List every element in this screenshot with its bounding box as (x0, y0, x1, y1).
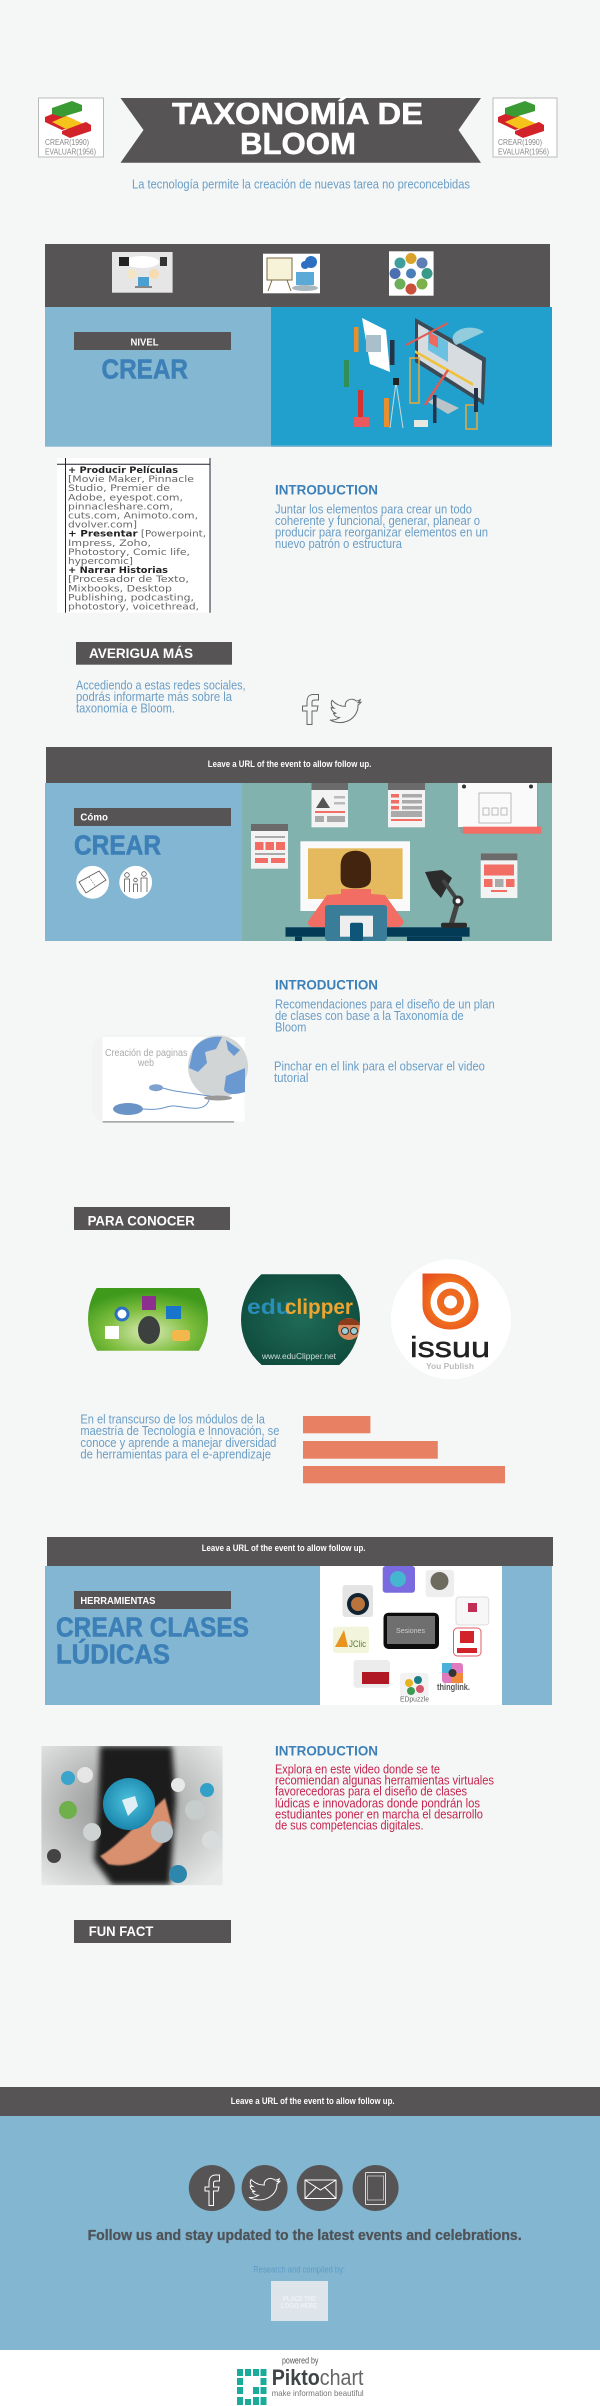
tools list image: [Movie Maker, Pinnacle (68, 475, 195, 485)
tools list image (57, 458, 210, 613)
header: logo left (38, 98, 104, 157)
label bar: para conocer (74, 1207, 230, 1230)
window E (481, 853, 517, 898)
label bar: nivel (74, 332, 231, 350)
call to action text: Follow us and stay updated to the latest events and celebrations. (88, 2227, 522, 2244)
logo: issuu: You Publish (426, 1362, 474, 1371)
heading: crear clases lúdicas: LÚDICAS (56, 1638, 170, 1669)
footer: piktochart (0, 2350, 600, 2406)
label bar: para conocer: PARA CONOCER (88, 1212, 195, 1228)
tools list image: + Producir Películas (68, 466, 178, 476)
introduction 3: lúdicas e innovadoras donde pondrán los (275, 1797, 480, 1811)
piktochart wordmark: Piktochart (272, 2365, 364, 2390)
powered by: powered by (282, 2355, 319, 2365)
introduction 1: INTRODUCTION (275, 481, 378, 497)
introduction 1: nuevo patrón o estructura (275, 537, 402, 551)
text: redes sociales: Accediendo a estas redes sociales, (76, 679, 246, 693)
introduction 2 (274, 976, 495, 1085)
label bar: nivel: NIVEL (130, 338, 158, 348)
introduction 1 (275, 481, 488, 551)
header: logo right: CREAR(1990) (498, 138, 542, 147)
illustration: web design team (271, 307, 552, 447)
panel: follow us (0, 2116, 600, 2350)
introduction 1: producir para reorganizar elementos en un (275, 525, 488, 539)
introduction 3: Explora en este video donde se te (275, 1763, 440, 1777)
label bar: herramientas: HERRAMIENTAS (80, 1595, 155, 1607)
label bar: cómo: Cómo (80, 812, 108, 824)
icon: twitter (242, 2165, 288, 2211)
image: educlipper: clipper (285, 1296, 353, 1319)
band: url 1: Leave a URL of the event to allow follow up. (208, 759, 371, 770)
heading: crear clases lúdicas: CREAR CLASES (56, 1612, 249, 1643)
text: módulos maestría: conoce y aprende a manejar diversidad (80, 1436, 276, 1450)
header: logo right: EVALUAR(1956) (498, 147, 549, 156)
image: app collage (320, 1566, 502, 1705)
icon: mail (297, 2165, 343, 2211)
image: hand holding globe (41, 1746, 223, 1885)
header: logo left: EVALUAR(1956) (45, 147, 96, 156)
logo placeholder: LOGO HERE (281, 2303, 317, 2310)
introduction 3: INTRODUCTION (275, 1742, 378, 1758)
icon: phone (353, 2165, 399, 2211)
label bar: fun fact (74, 1920, 231, 1943)
icon: facebook (189, 2165, 235, 2211)
image: educlipper: www.eduClipper.net (261, 1352, 337, 1361)
thumbnail: colour wheel (389, 251, 434, 296)
logo placeholder (271, 2281, 328, 2321)
image: app collage: EDpuzzle (400, 1696, 429, 1704)
heading: crear: CREAR (74, 829, 161, 860)
tools list image: Studio, Premier de (68, 484, 171, 494)
image: creación de paginas web: web (137, 1058, 154, 1069)
text: redes sociales: taxonomía e Bloom. (76, 701, 175, 715)
piktochart logo mark (237, 2369, 266, 2405)
logo: issuu (391, 1259, 511, 1379)
poster (458, 783, 542, 834)
window B (388, 783, 425, 827)
panel: herramientas (45, 1566, 552, 1705)
tools list image: Photostory, Comic life, (68, 548, 190, 558)
text: redes sociales: podrás informarte más sobre la (76, 690, 232, 704)
introduction 1: Juntar los elementos para crear un todo (275, 503, 472, 517)
text: módulos maestría: de herramientas para el e-aprendizaje (80, 1447, 271, 1461)
icon: twitter outline (330, 699, 361, 723)
introduction 3: de sus competencias digitales. (275, 1819, 424, 1833)
image: creación de paginas web: Creación de paginas (105, 1048, 188, 1059)
title banner: BLOOM (240, 126, 356, 161)
tools list image: cuts.com, Animoto.com, (68, 512, 198, 522)
thumbnail: easel and computer (263, 254, 320, 293)
icon: ticket (76, 866, 109, 899)
image: creación de paginas web (92, 1035, 248, 1123)
image: app collage: JClic (349, 1639, 366, 1649)
title banner: TAXONOMÍA DE (172, 96, 423, 131)
subtitle: La tecnología permite la creación de nuevas tarea no preconcebidas (132, 176, 470, 192)
tools list image: [Procesador de Texto, (68, 575, 189, 585)
header: logo right (493, 98, 557, 157)
introduction 3: estudiantes poner en marcha el desarrollo (275, 1808, 483, 1822)
label bar: averigua más: AVERIGUA MÁS (89, 646, 193, 661)
text: módulos maestría (80, 1413, 279, 1461)
research credit: Research and compiled by: (253, 2264, 345, 2275)
introduction 2: tutorial (274, 1071, 308, 1085)
label bar: fun fact: FUN FACT (89, 1923, 154, 1939)
tools list image: Mixbooks, Desktop (68, 584, 172, 594)
introduction 2: Pinchar en el link para el observar el video (274, 1060, 485, 1074)
icon: family (119, 866, 152, 899)
tools list image: pinnacleshare.com, (68, 502, 173, 512)
band: url 2 (47, 1537, 553, 1566)
window D (251, 824, 288, 869)
band: url 1 (46, 747, 552, 783)
header: logo left: CREAR(1990) (45, 138, 89, 147)
image: app collage: thinglink. (437, 1682, 470, 1692)
text: módulos maestría: maestría de Tecnología e Innovación, se (80, 1424, 279, 1438)
tagline: make information beautiful (272, 2388, 364, 2398)
label bar: averigua más (76, 642, 232, 665)
window A (312, 783, 348, 827)
icon: facebook outline (302, 694, 318, 724)
illustration: person at computer (242, 783, 552, 941)
band: url 3: Leave a URL of the event to allow follow up. (231, 2096, 395, 2107)
title banner (120, 96, 481, 163)
tools list image: photostory, voicethread, (68, 602, 199, 612)
logo placeholder: PLACE THE (283, 2296, 316, 2303)
image: app collage: Sesiones (396, 1628, 426, 1635)
tools list image: Publishing, podcasting, (68, 593, 194, 603)
label bar: herramientas (74, 1591, 231, 1609)
heading: crear: CREAR (102, 353, 188, 384)
introduction 3 (275, 1742, 494, 1833)
introduction 2: INTRODUCTION (275, 976, 378, 992)
introduction 3: favorecedoras para el diseño de clases (275, 1785, 467, 1799)
introduction 3: recomiendan algunas herramientas virtuales (275, 1774, 494, 1788)
logo: issuu: issuu (410, 1332, 490, 1364)
tools list image: Adobe, eyespot.com, (68, 493, 183, 503)
tools list image: dvolver.com] (68, 521, 137, 531)
panel: nivel crear (45, 307, 271, 447)
band: url 2: Leave a URL of the event to allow follow up. (202, 1543, 366, 1554)
panel: cómo crear (45, 783, 242, 941)
band with thumbnails (45, 244, 550, 307)
tools list image: hypercomic] (68, 557, 133, 567)
band: url 3 (0, 2087, 600, 2116)
image: educlipper (241, 1274, 361, 1365)
label bar: cómo (74, 808, 231, 826)
tools list image: Impress, Zoho, (68, 539, 151, 549)
desk lamp (425, 870, 467, 928)
introduction 2: de clases con base a la Taxonomía de (275, 1009, 464, 1023)
text: módulos maestría: En el transcurso de los módulos de la (80, 1413, 265, 1427)
introduction 2: Recomendaciones para el diseño de un plan (275, 998, 495, 1012)
introduction 2: Bloom (275, 1021, 306, 1035)
heading: crear clases lúdicas (56, 1612, 249, 1669)
monitor and person (286, 841, 470, 941)
image: educlipper: edu (247, 1296, 291, 1319)
image: evernote apps (88, 1288, 208, 1351)
bar chart (303, 1416, 505, 1483)
tools list image: + Narrar Historias (68, 566, 168, 576)
introduction 1: coherente y funcional, generar, planear o (275, 514, 480, 528)
text: redes sociales (76, 679, 246, 715)
tools list image: + Presentar [Powerpoint, (68, 530, 206, 540)
thumbnail: cloud tools (112, 252, 173, 293)
